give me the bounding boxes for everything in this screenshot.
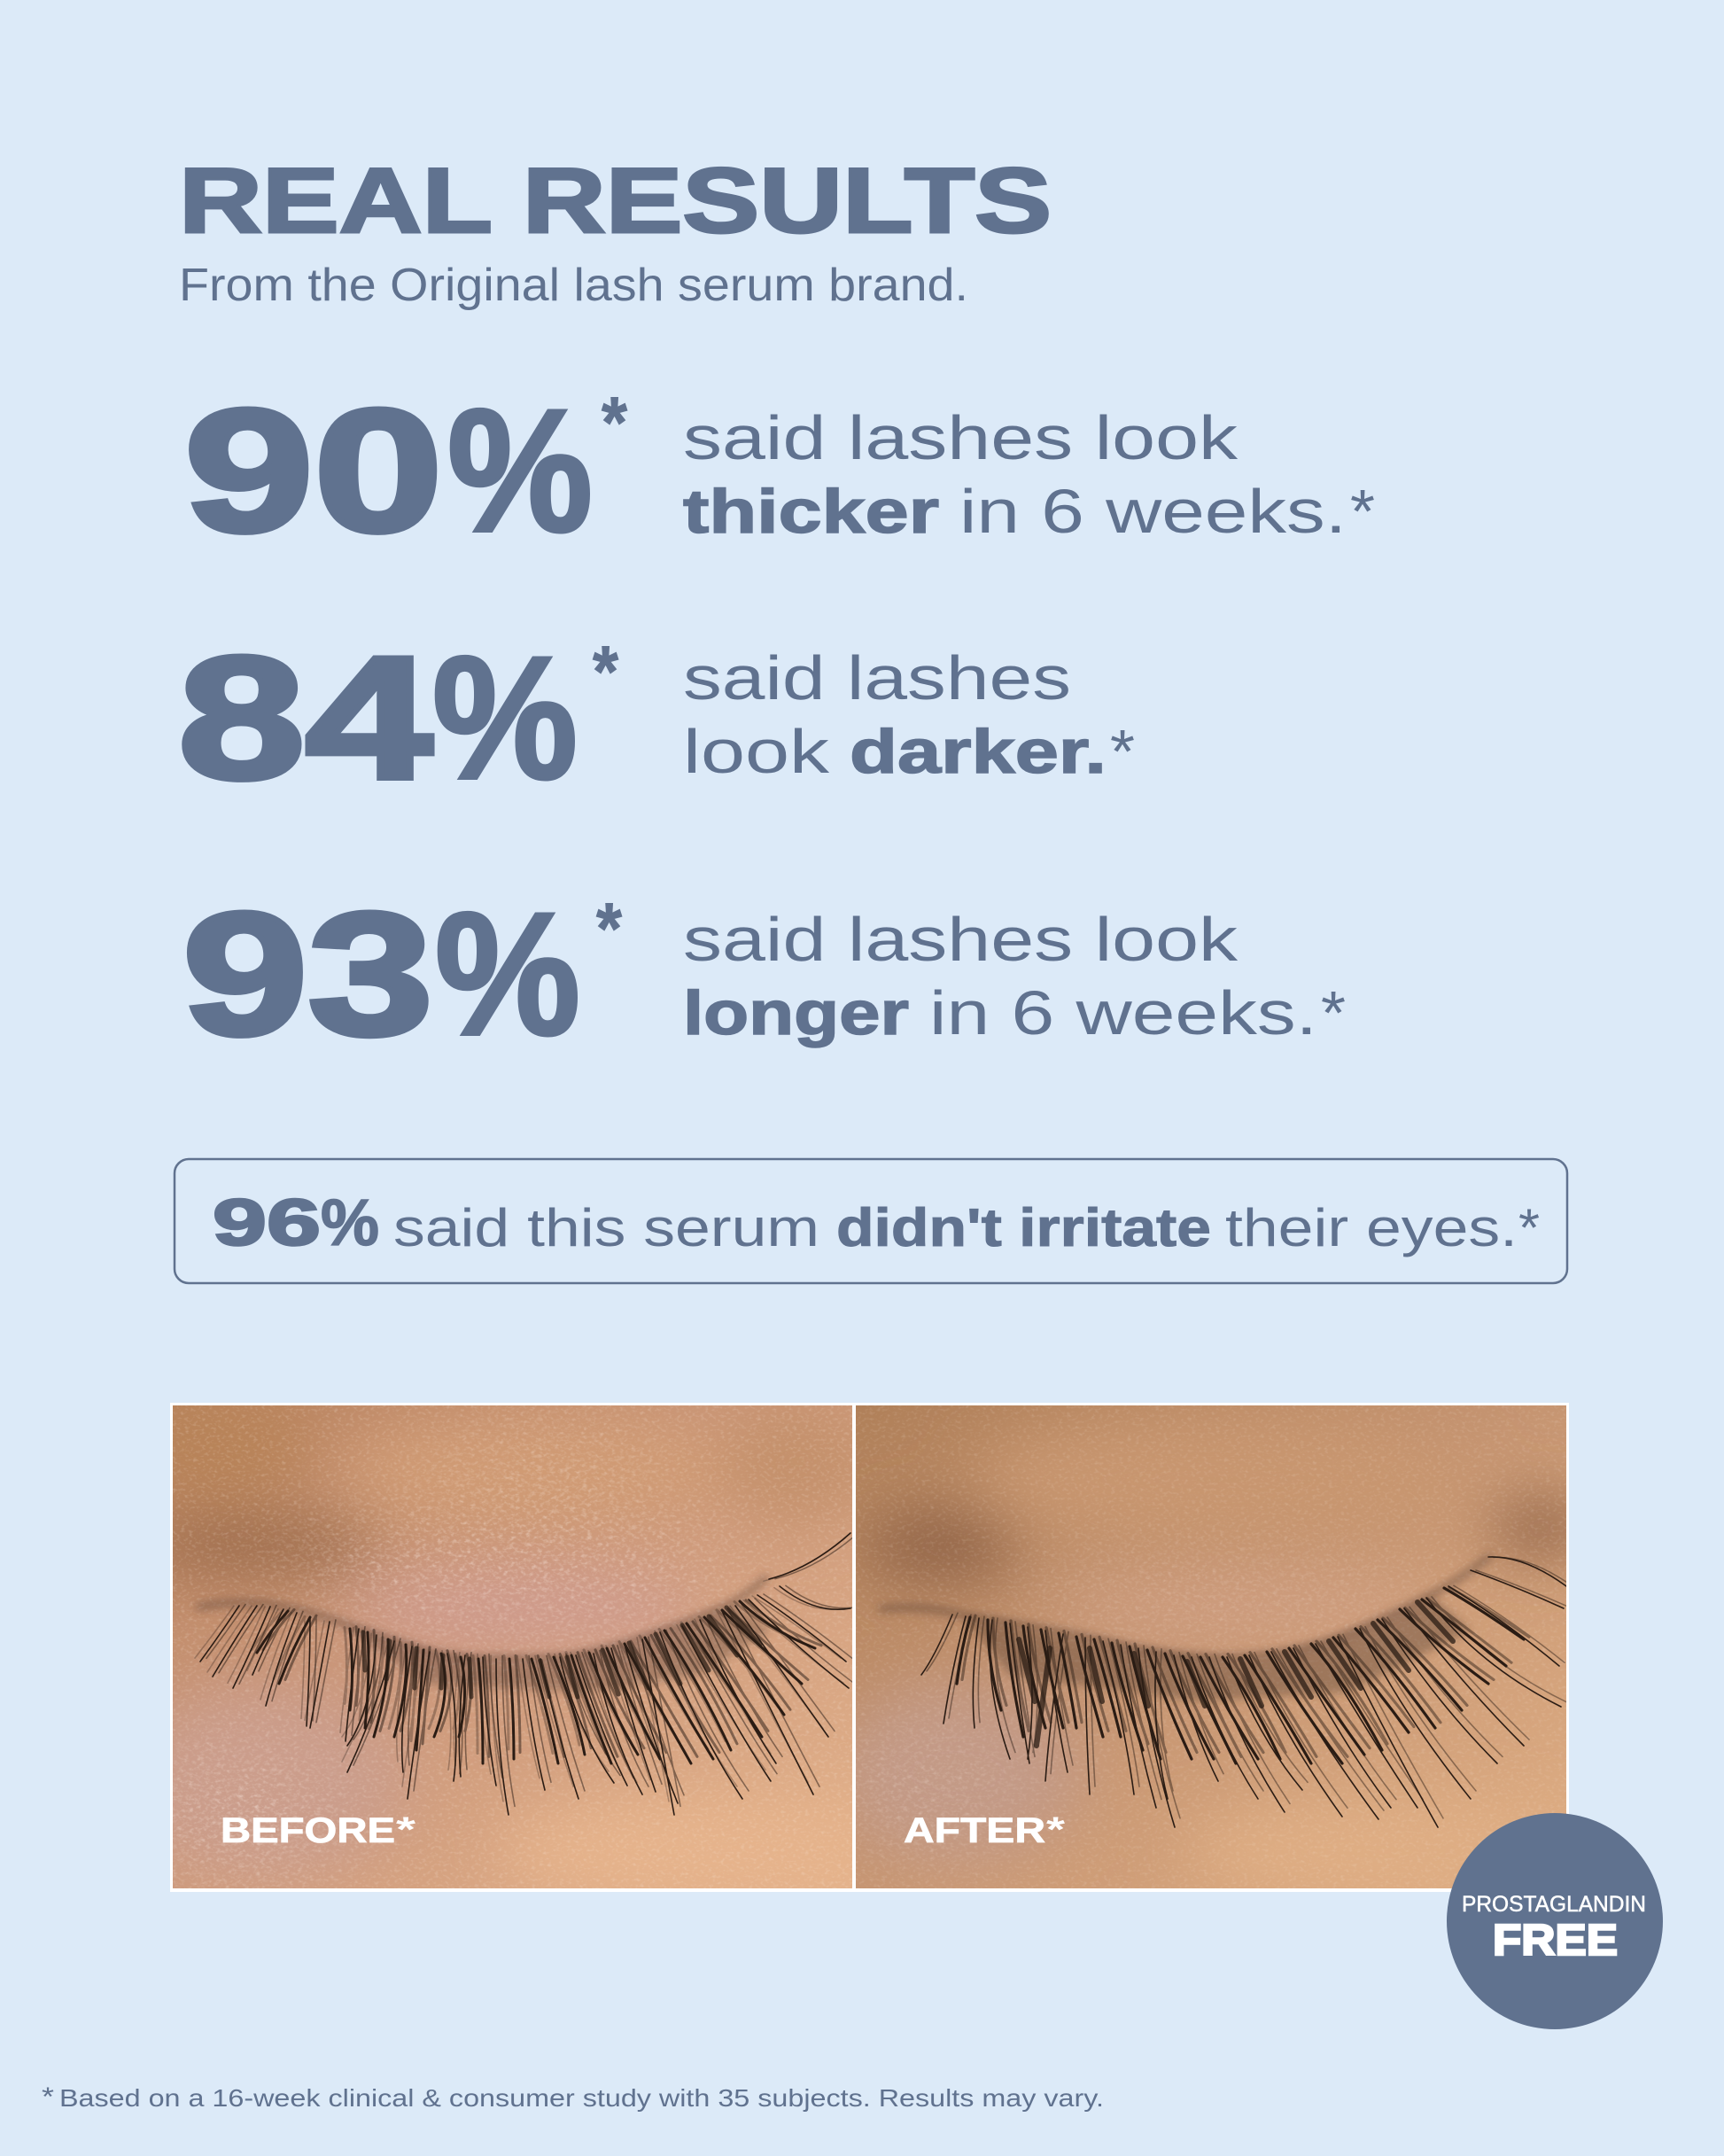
stat: 93% longer: said lashes look — [683, 905, 1239, 974]
badge: prostaglandin free: PROSTAGLANDIN — [1462, 1892, 1646, 1917]
label: before: BEFORE — [221, 1811, 395, 1850]
footnote: * — [42, 2082, 54, 2112]
title: REAL RESULTS — [179, 150, 1052, 253]
lashes — [195, 1533, 857, 1815]
asterisk: before: * — [396, 1810, 416, 1849]
stat: 93% longer: in 6 weeks. — [929, 978, 1317, 1047]
photo: before — [173, 1405, 852, 1888]
stat: 90% thicker — [184, 373, 1375, 568]
badge: prostaglandin free: FREE — [1493, 1917, 1618, 1965]
callout: 96% no irritation: * — [1518, 1198, 1540, 1257]
stat: 90% thicker: * — [602, 383, 627, 463]
label: after: AFTER — [904, 1811, 1045, 1850]
photo frame — [170, 1403, 1569, 1892]
stat: 84% darker: 84 — [178, 620, 432, 815]
callout: 96% no irritation: didn't irritate — [836, 1198, 1211, 1257]
stat: 84% darker: % — [432, 620, 578, 815]
stat: 93% longer: * — [596, 889, 622, 969]
stat: 93% longer: 93 — [182, 876, 433, 1071]
stat: 93% longer: % — [435, 876, 580, 1071]
stat: 84% darker — [178, 620, 1135, 815]
stat: 90% thicker: * — [1350, 477, 1375, 546]
footnote: Based on a 16-week clinical & consumer study with 35 subjects. Results may vary. — [59, 2084, 1104, 2112]
stat: 84% darker: darker. — [850, 717, 1107, 786]
subtitle: From the Original lash serum brand. — [179, 260, 968, 311]
callout: 96% no irritation: said this serum — [393, 1198, 819, 1257]
lash line shadow — [197, 1576, 767, 1659]
photo: after — [833, 1405, 1595, 1901]
stat: 90% thicker: % — [447, 373, 593, 568]
callout: 96% no irritation: % — [321, 1186, 379, 1259]
badge: prostaglandin free — [1447, 1813, 1663, 2029]
stat: 90% thicker: 90 — [184, 373, 443, 568]
stat: 90% thicker: said lashes look — [683, 403, 1239, 472]
callout: 96% no irritation: their eyes. — [1225, 1198, 1518, 1257]
callout: 96% no irritation: 96 — [213, 1186, 321, 1259]
callout: 96% no irritation — [175, 1159, 1567, 1283]
lash line shadow — [879, 1555, 1491, 1657]
stat: 93% longer: longer — [683, 978, 909, 1047]
lashes — [921, 1557, 1572, 1827]
stat: 90% thicker: in 6 weeks. — [959, 477, 1347, 546]
stat: 93% longer — [182, 876, 1346, 1071]
stat: 84% darker: * — [1110, 717, 1135, 786]
stat: 84% darker: said lashes — [683, 643, 1071, 712]
stat: 93% longer: * — [1321, 978, 1346, 1047]
stat: 84% darker: look — [683, 717, 830, 786]
stat: 90% thicker: thicker — [683, 477, 939, 546]
asterisk: after: * — [1046, 1810, 1066, 1849]
stat: 84% darker: * — [593, 632, 618, 712]
